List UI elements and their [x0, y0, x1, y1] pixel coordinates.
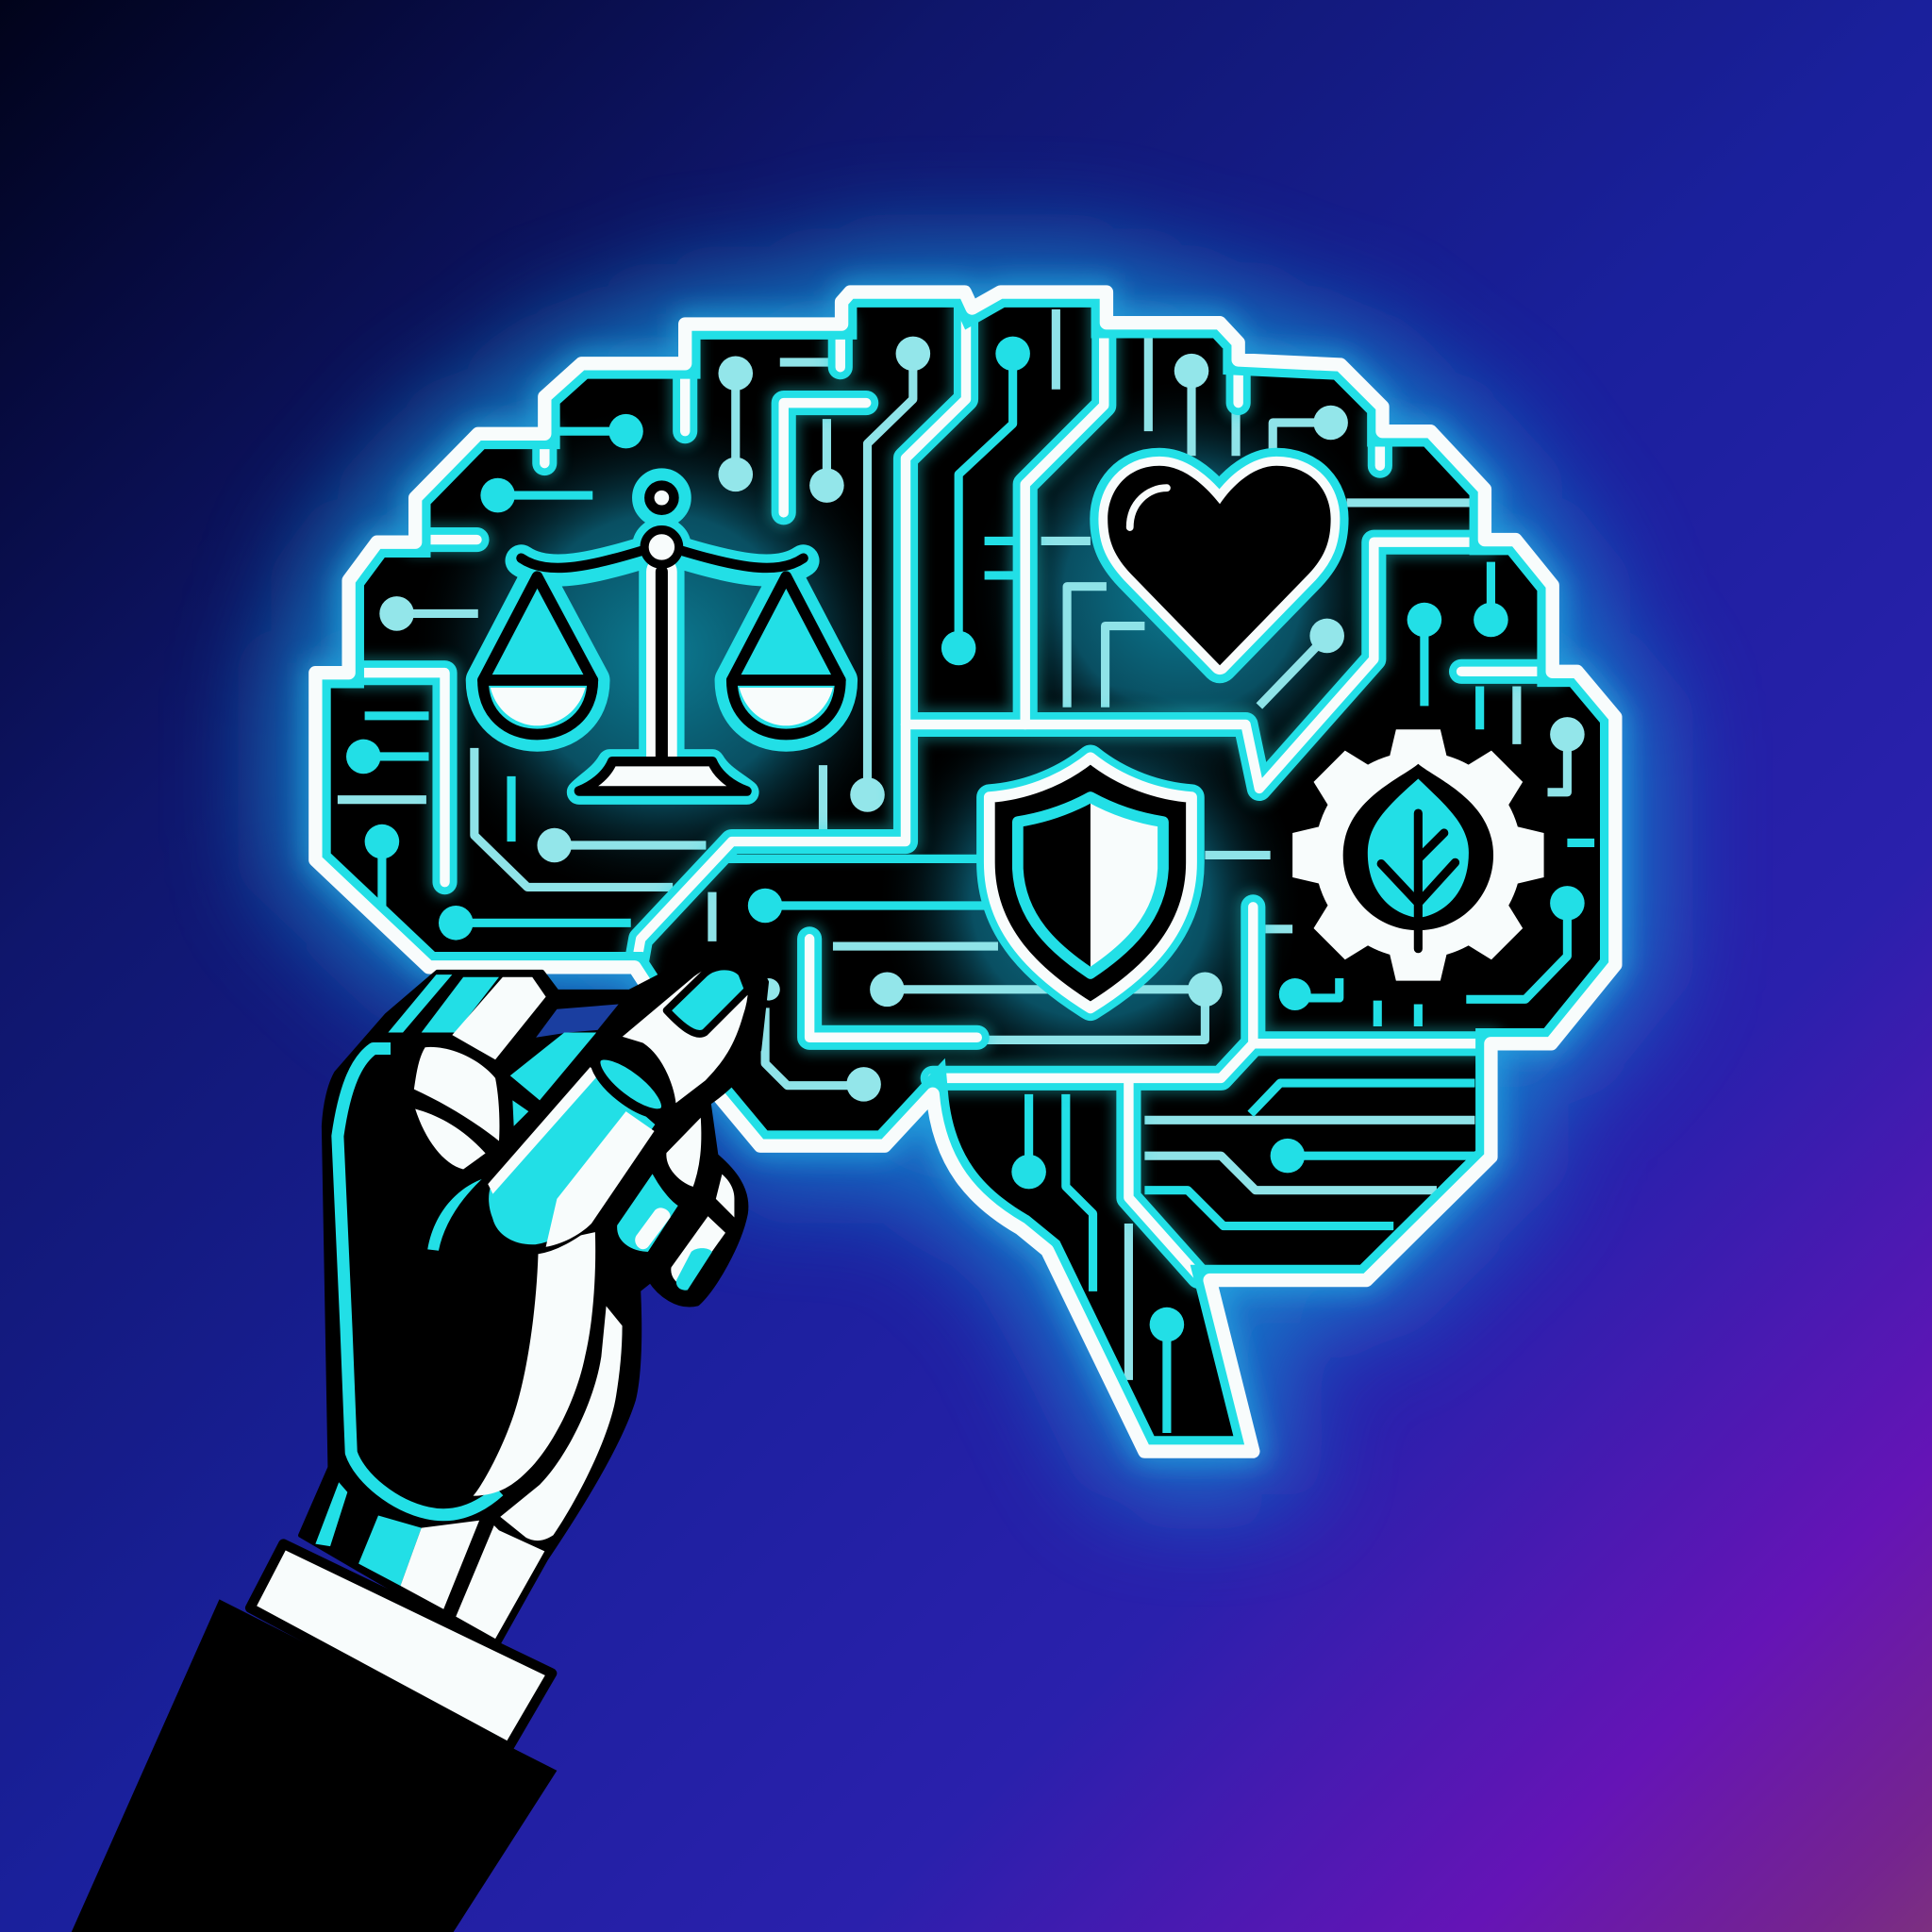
- circuit walls: [349, 295, 1553, 1276]
- hand silhouette: [301, 950, 766, 1649]
- fingernail: [667, 966, 748, 1034]
- shirt cuff: [250, 1544, 552, 1747]
- scale pans: [483, 576, 592, 734]
- knuckle lower: [415, 1109, 486, 1170]
- cyan circuit traces: [363, 354, 1594, 1433]
- robotic hand: [72, 950, 766, 1932]
- cyan trace nodes: [346, 337, 1585, 1341]
- index finger base: [484, 1062, 661, 1249]
- brain outline: [315, 292, 1615, 1452]
- top ring: [649, 486, 674, 510]
- icon: shield: [990, 758, 1191, 1008]
- pan dividers: [483, 675, 841, 684]
- leaf: [1368, 778, 1469, 918]
- heart highlight: [1130, 488, 1167, 527]
- icon: gear with leaf: [1292, 729, 1544, 981]
- circuit brain: [315, 292, 1615, 1452]
- shield inner right half: [1091, 797, 1163, 974]
- index fingertip: [612, 959, 753, 1112]
- beam: [521, 544, 804, 568]
- base: [579, 761, 747, 791]
- pale circuit traces: [338, 309, 1567, 1380]
- sleeve: [72, 1599, 557, 1932]
- knuckle upper: [414, 1047, 499, 1141]
- interior teal glows: [441, 404, 1361, 1066]
- leaf veins: [1381, 813, 1456, 949]
- icon: scales of justice: [483, 475, 841, 792]
- gear teeth: [1292, 729, 1544, 981]
- finger joint: [587, 1045, 675, 1124]
- pale trace nodes: [379, 337, 1585, 1102]
- back finger stripes: [388, 974, 596, 1126]
- brain fill: [315, 292, 1615, 1452]
- thin palm crease: [427, 1179, 482, 1251]
- middle finger: [612, 1107, 707, 1257]
- scales halo: [483, 475, 841, 792]
- gear hub: [1343, 764, 1493, 930]
- shield inner outline: [1018, 797, 1163, 974]
- pan bowls: [491, 688, 833, 725]
- pinky finger: [666, 1174, 734, 1291]
- palm edge: [338, 1049, 499, 1515]
- brain glow: [315, 292, 1615, 1452]
- gap between fingers: [536, 1004, 619, 1038]
- scales post and beam: [650, 572, 674, 757]
- right pan: [732, 576, 841, 734]
- wrist stripes: [315, 1482, 544, 1639]
- pivot ball: [644, 530, 679, 564]
- icon: heart: [1108, 466, 1331, 665]
- outer band: [500, 1306, 623, 1541]
- palm side band: [474, 1232, 595, 1496]
